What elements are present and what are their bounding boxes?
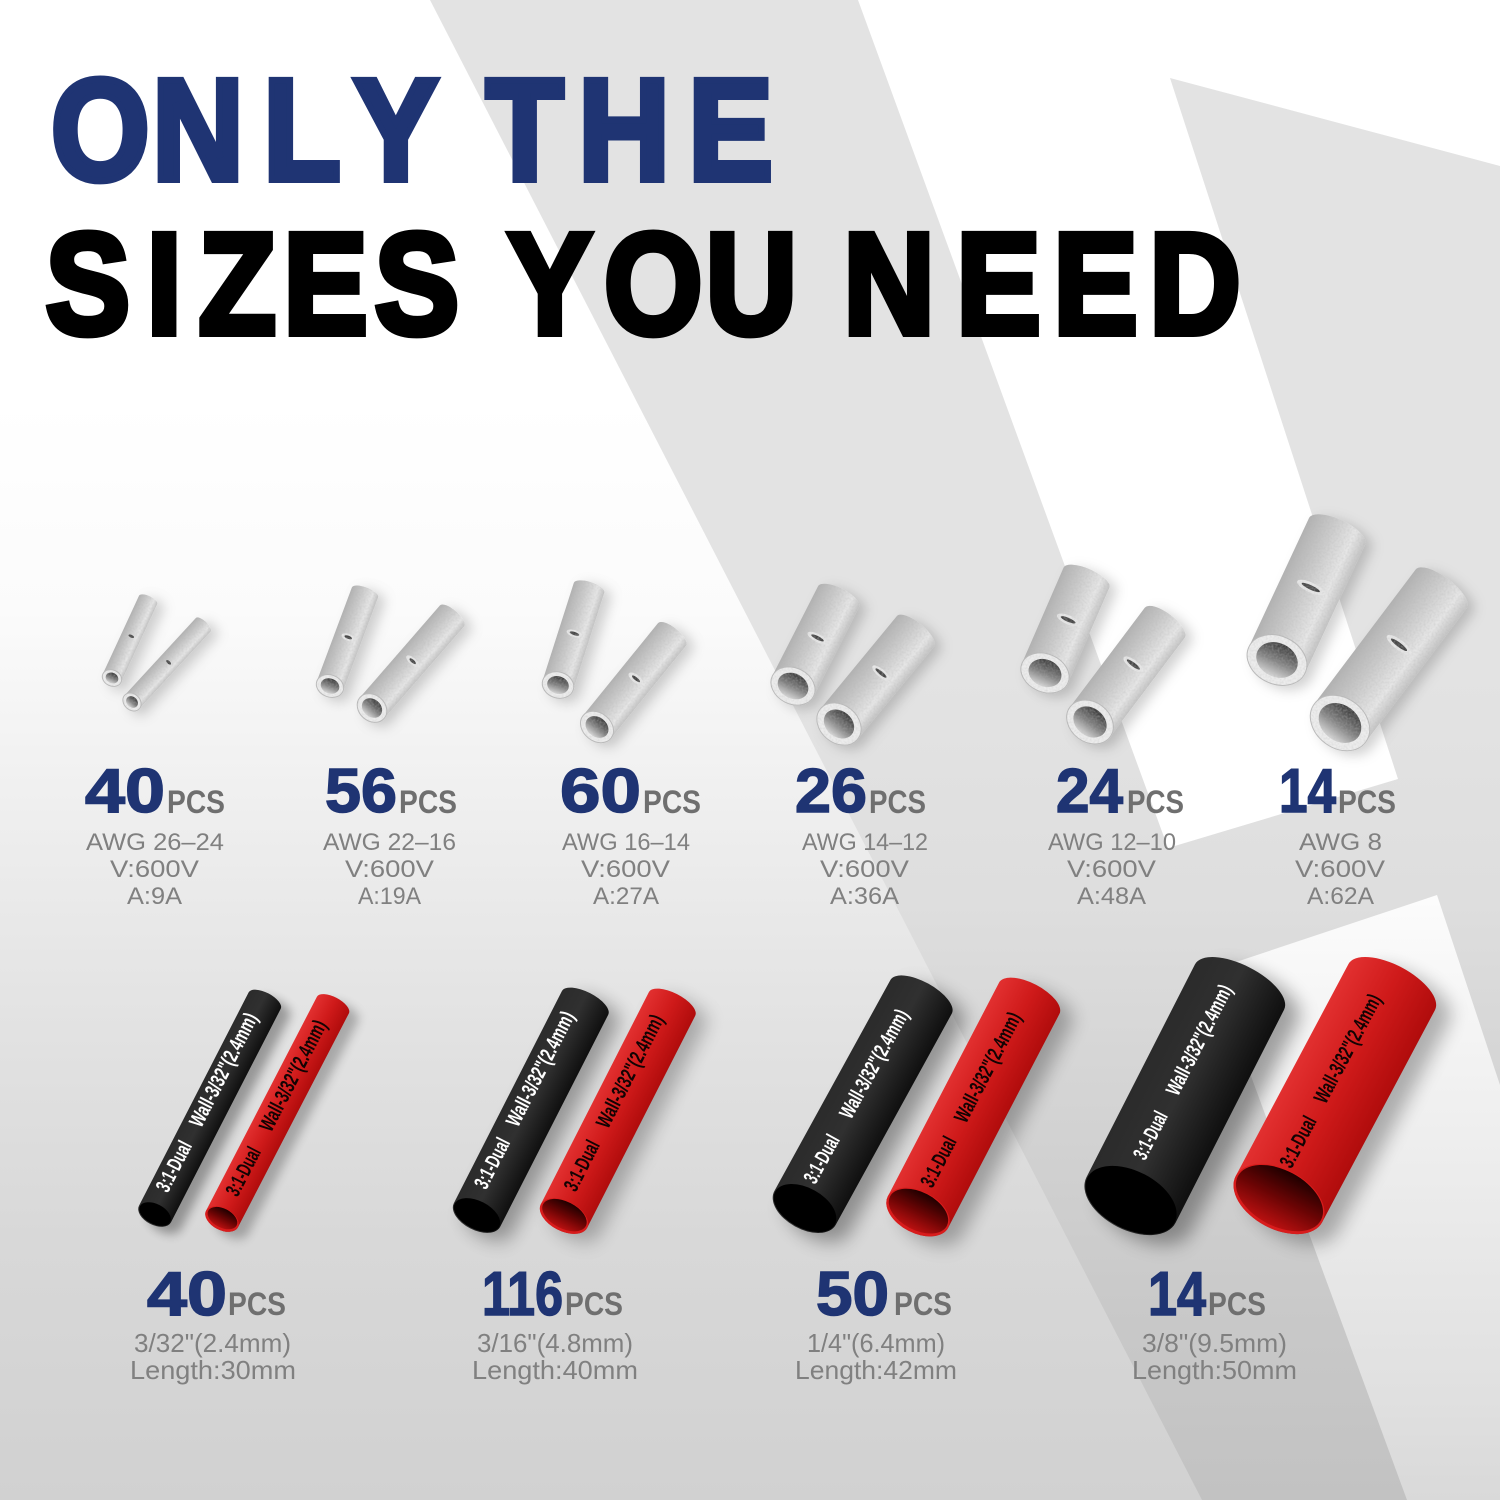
specs <box>802 829 928 910</box>
count <box>560 757 701 826</box>
specs: 3/32"(2.4mm) <box>134 1328 291 1358</box>
specs <box>86 829 224 910</box>
count: 40 <box>147 1260 227 1329</box>
specs <box>130 1328 296 1385</box>
icon: black and red tubes: Wall-3/32"(2.4mm) <box>255 1016 332 1135</box>
count: PCS <box>1338 784 1396 820</box>
count: PCS <box>1127 784 1184 820</box>
panel: AWG 26-24 connectors <box>85 592 225 910</box>
icon: black and red tubes: 3:1-Dual <box>152 1137 197 1196</box>
panel: 3/16 heat shrink <box>446 981 713 1385</box>
panel: AWG 12-10 connectors <box>1014 559 1191 910</box>
count: PCS <box>894 1286 952 1322</box>
count: PCS <box>167 784 225 820</box>
specs: AWG 22–16 <box>323 829 456 856</box>
panel: 1/4 heat shrink <box>763 967 1081 1385</box>
count: PCS <box>869 784 926 820</box>
icon: black and red tubes: 3:1-Dual <box>560 1137 605 1195</box>
icon: black and red tubes: Wall-3/32"(2.4mm) <box>1162 981 1237 1099</box>
count: PCS <box>399 784 457 820</box>
count <box>85 757 225 826</box>
panel: 3/8 heat shrink <box>1072 945 1461 1385</box>
icon: black and red tubes: 3:1-Dual <box>470 1134 515 1193</box>
icon: butt connectors <box>313 583 468 728</box>
specs: A:62A <box>1307 883 1375 910</box>
specs: V:600V <box>820 856 910 883</box>
count: 116 <box>482 1260 563 1329</box>
icon: black and red tubes: Wall-3/32"(2.4mm) <box>1310 990 1386 1107</box>
specs <box>795 1328 957 1385</box>
icon: black and red tubes <box>1072 945 1461 1259</box>
specs: Length:50mm <box>1132 1355 1297 1385</box>
specs: A:48A <box>1077 883 1147 910</box>
count <box>325 757 457 826</box>
specs: A:36A <box>830 883 900 910</box>
title <box>46 49 1241 364</box>
count: 40 <box>85 757 165 826</box>
specs: AWG 8 <box>1299 829 1382 856</box>
count <box>147 1260 286 1329</box>
count <box>1148 1260 1266 1329</box>
count: 60 <box>560 757 641 826</box>
count: 56 <box>325 757 397 826</box>
icon: butt connectors <box>1239 507 1474 762</box>
count: PCS <box>565 1286 623 1322</box>
specs <box>1132 1328 1297 1385</box>
icon: black and red tubes: Wall-3/32"(2.4mm) <box>835 1006 914 1123</box>
panel: AWG 16-14 connectors <box>539 577 701 910</box>
specs: A:27A <box>593 883 660 910</box>
count: 14 <box>1148 1260 1206 1329</box>
count <box>816 1260 952 1329</box>
count: PCS <box>1208 1286 1266 1322</box>
count: PCS <box>228 1286 286 1322</box>
panel: AWG 14-12 connectors <box>764 578 940 910</box>
specs: V:600V <box>1295 856 1386 883</box>
count: 24 <box>1056 757 1123 826</box>
count: PCS <box>643 784 701 820</box>
count: 14 <box>1279 757 1336 826</box>
icon: butt connectors <box>1014 559 1191 753</box>
icon: black and red tubes: Wall-3/32"(2.4mm) <box>950 1009 1026 1127</box>
panel: AWG 22-16 connectors <box>313 583 468 910</box>
panel: AWG 8 connectors <box>1239 507 1474 910</box>
specs: AWG 16–14 <box>562 829 690 856</box>
icon: black and red tubes <box>763 967 1081 1255</box>
icon: black and red tubes: 3:1-Dual <box>222 1143 266 1200</box>
count <box>1279 757 1396 826</box>
icon: black and red tubes: Wall-3/32"(2.4mm) <box>185 1009 263 1131</box>
specs: AWG 26–24 <box>86 829 224 856</box>
count: 26 <box>795 757 867 826</box>
specs: A:9A <box>127 883 183 910</box>
specs: 3/16"(4.8mm) <box>477 1328 633 1358</box>
title: SIZES YOU NEED <box>46 203 1241 364</box>
specs: A:19A <box>358 883 422 910</box>
specs: V:600V <box>345 856 435 883</box>
specs <box>323 829 456 910</box>
specs: Length:40mm <box>472 1355 638 1385</box>
specs: 1/4"(6.4mm) <box>807 1328 945 1358</box>
count <box>795 757 926 826</box>
specs: 3/8"(9.5mm) <box>1142 1328 1287 1358</box>
count: 50 <box>816 1260 889 1329</box>
icon: black and red tubes <box>446 981 713 1249</box>
specs: V:600V <box>581 856 671 883</box>
specs <box>1048 829 1176 910</box>
panel: 3/32 heat shrink <box>130 985 363 1385</box>
specs: V:600V <box>110 856 200 883</box>
count <box>1056 757 1184 826</box>
icon: butt connectors <box>539 577 690 749</box>
icon: butt connectors <box>764 578 940 754</box>
specs: Length:42mm <box>795 1355 957 1385</box>
icon: black and red tubes: 3:1-Dual <box>1275 1112 1322 1172</box>
specs <box>562 829 690 910</box>
icon: black and red tubes <box>133 985 363 1244</box>
icon: black and red tubes: Wall-3/32"(2.4mm) <box>502 1008 580 1130</box>
icon: black and red tubes: Wall-3/32"(2.4mm) <box>592 1011 669 1132</box>
specs: V:600V <box>1067 856 1157 883</box>
icon: butt connectors <box>100 592 213 715</box>
specs <box>472 1328 638 1385</box>
icon: black and red tubes: 3:1-Dual <box>1129 1108 1173 1163</box>
icon: black and red tubes: 3:1-Dual <box>800 1131 845 1188</box>
specs <box>1295 829 1386 910</box>
specs: Length:30mm <box>130 1355 296 1385</box>
specs: AWG 12–10 <box>1048 829 1176 856</box>
specs: AWG 14–12 <box>802 829 928 856</box>
title: ONLY THE <box>51 49 773 210</box>
icon: black and red tubes: 3:1-Dual <box>916 1133 962 1191</box>
